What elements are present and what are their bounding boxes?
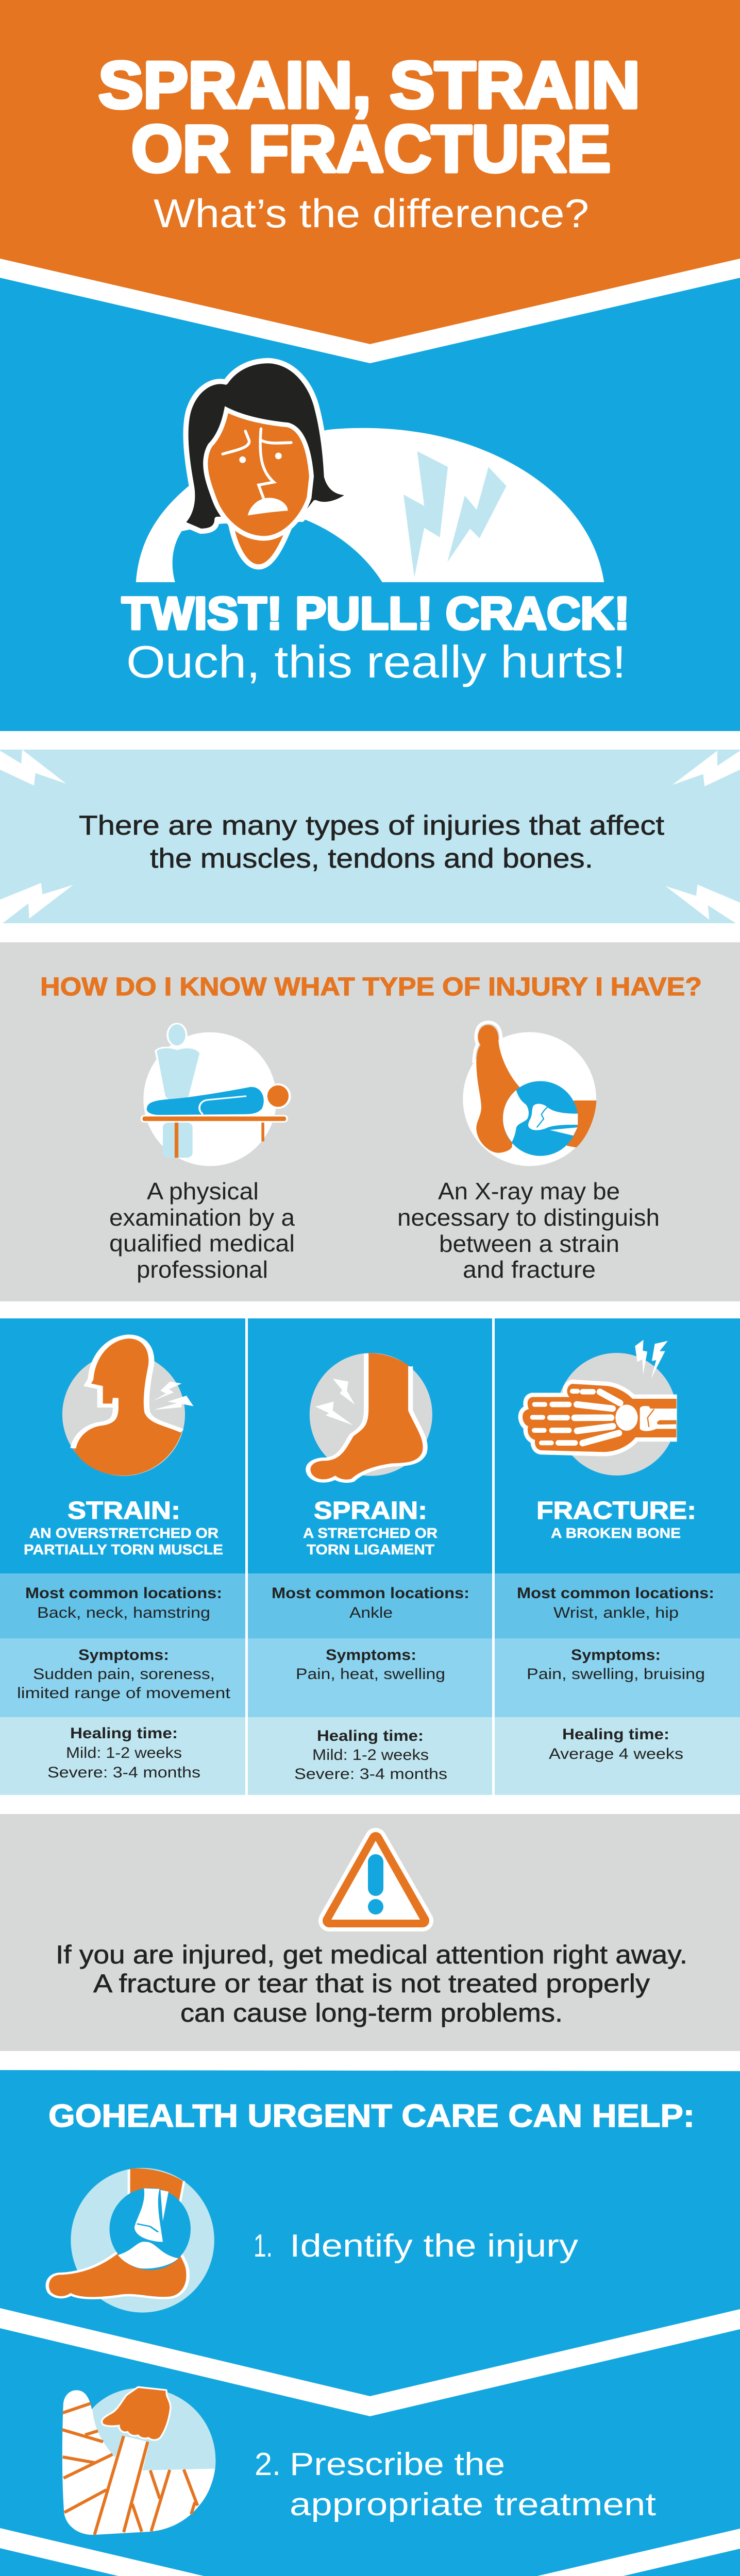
icon: step 1 ankle — [47, 2168, 214, 2313]
definition: strain: PARTIALLY TORN MUSCLE — [24, 1541, 223, 1557]
text: intro: the muscles, tendons and bones. — [150, 843, 593, 874]
locations: fracture: Wrist, ankle, hip — [553, 1604, 679, 1621]
panel: warning — [0, 1814, 740, 2051]
text: physical examination: A physical — [147, 1178, 259, 1205]
text: x-ray: between a strain — [439, 1230, 619, 1257]
text: physical examination: examination by a — [109, 1204, 295, 1231]
column: sprain — [272, 1497, 469, 1783]
white chevron band 2 — [0, 2528, 740, 2576]
healing time: sprain: Mild: 1-2 weeks — [312, 1747, 429, 1764]
symptoms: strain: limited range of movement — [17, 1685, 231, 1702]
locations: strain: Most common locations: — [25, 1585, 222, 1602]
healing time: strain: Healing time: — [70, 1725, 178, 1742]
symptoms: sprain: Symptoms: — [326, 1647, 416, 1664]
healing time: strain — [47, 1725, 200, 1781]
symptoms: strain: Symptoms: — [78, 1647, 169, 1664]
step 2 text — [255, 2447, 656, 2522]
heading: fracture: FRACTURE: — [536, 1497, 696, 1524]
icon: physical examination — [142, 1024, 290, 1166]
column: strain — [17, 1497, 231, 1781]
locations: sprain — [272, 1585, 469, 1621]
icon: fracture — [523, 1340, 687, 1476]
panel: hero — [0, 278, 740, 731]
subtitle: What’s the difference? — [154, 191, 589, 236]
heading: twist pull crack: TWIST! PULL! CRACK! — [122, 587, 630, 639]
definition: strain: AN OVERSTRETCHED OR — [29, 1525, 218, 1541]
icon: step 2 cast — [62, 2388, 215, 2535]
definition: sprain: A STRETCHED OR — [303, 1525, 438, 1541]
locations: strain: Back, neck, hamstring — [37, 1604, 210, 1621]
heading: GOHEALTH URGENT CARE CAN HELP: — [48, 2098, 695, 2134]
healing time: sprain — [294, 1727, 447, 1783]
step 2 text: 2. — [255, 2447, 281, 2482]
symptoms: fracture: Symptoms: — [571, 1647, 661, 1664]
text: x-ray: An X-ray may be — [438, 1178, 620, 1205]
icon: corner lightning bolts — [0, 750, 740, 923]
symptoms: fracture: Pain, swelling, bruising — [527, 1666, 705, 1683]
locations: sprain: Most common locations: — [272, 1585, 469, 1602]
heading: sprain: SPRAIN: — [314, 1497, 427, 1524]
definition: sprain: TORN LIGAMENT — [307, 1541, 434, 1557]
panel: gohealth can help — [0, 2070, 740, 2576]
text: warning message: If you are injured, get medical attention right away. — [56, 1940, 687, 1969]
panel: header — [0, 0, 740, 344]
definition: strain — [24, 1525, 223, 1557]
text: physical examination: qualified medical — [109, 1230, 295, 1257]
healing time: fracture: Average 4 weeks — [549, 1745, 683, 1762]
healing time: strain: Mild: 1-2 weeks — [66, 1744, 182, 1761]
step 2 text: Prescribe the — [290, 2447, 505, 2482]
step 1 text: Identify the injury — [290, 2228, 578, 2264]
subheading: ouch: Ouch, this really hurts! — [126, 636, 626, 687]
text: x-ray: necessary to distinguish — [397, 1204, 660, 1231]
step 2 text: appropriate treatment — [290, 2487, 656, 2522]
white chevron band 1 — [0, 2308, 740, 2416]
text: intro — [79, 810, 664, 874]
symptoms: strain: Sudden pain, soreness, — [33, 1666, 215, 1683]
text: physical examination — [109, 1178, 295, 1283]
title — [98, 48, 640, 186]
healing time: sprain: Healing time: — [317, 1727, 424, 1744]
symptoms: sprain — [296, 1647, 445, 1683]
step 1 text: 1. — [254, 2228, 273, 2264]
symptoms: strain — [17, 1647, 231, 1702]
icon: x-ray — [463, 1022, 596, 1166]
healing time: fracture — [549, 1726, 683, 1762]
text: x-ray: and fracture — [463, 1256, 596, 1283]
locations: strain — [25, 1585, 222, 1621]
heading: HOW DO I KNOW WHAT TYPE OF INJURY I HAVE? — [40, 972, 702, 1001]
illustration: woman in pain — [136, 361, 604, 582]
title: OR FRACTURE — [131, 112, 611, 186]
panel: comparison table — [0, 1318, 740, 1795]
icon: strain — [62, 1336, 193, 1476]
panel: intro statement — [0, 750, 740, 923]
text: physical examination: professional — [137, 1256, 268, 1283]
locations: fracture: Most common locations: — [517, 1585, 714, 1602]
white chevron band — [0, 259, 740, 363]
definition: sprain — [303, 1525, 438, 1557]
symptoms: sprain: Pain, heat, swelling — [296, 1666, 445, 1683]
panel: how do I know — [0, 942, 740, 1301]
column: fracture — [517, 1497, 714, 1762]
text: warning message: can cause long-term problems. — [180, 1998, 563, 2027]
icon: warning triangle — [329, 1839, 423, 1921]
healing time: strain: Severe: 3-4 months — [47, 1764, 200, 1781]
heading: strain: STRAIN: — [68, 1497, 180, 1524]
definition: fracture: A BROKEN BONE — [551, 1525, 681, 1541]
icon: sprain — [308, 1353, 432, 1481]
healing time: sprain: Severe: 3-4 months — [294, 1766, 447, 1783]
title: SPRAIN, STRAIN — [98, 48, 640, 122]
locations: sprain: Ankle — [349, 1604, 393, 1621]
healing time: fracture: Healing time: — [562, 1726, 669, 1743]
locations: fracture — [517, 1585, 714, 1621]
text: intro: There are many types of injuries that affect — [79, 810, 664, 841]
text: warning message: A fracture or tear that is not treated properly — [93, 1969, 650, 1998]
symptoms: fracture — [527, 1647, 705, 1683]
text: x-ray — [397, 1178, 660, 1283]
text: warning message — [56, 1940, 687, 2027]
